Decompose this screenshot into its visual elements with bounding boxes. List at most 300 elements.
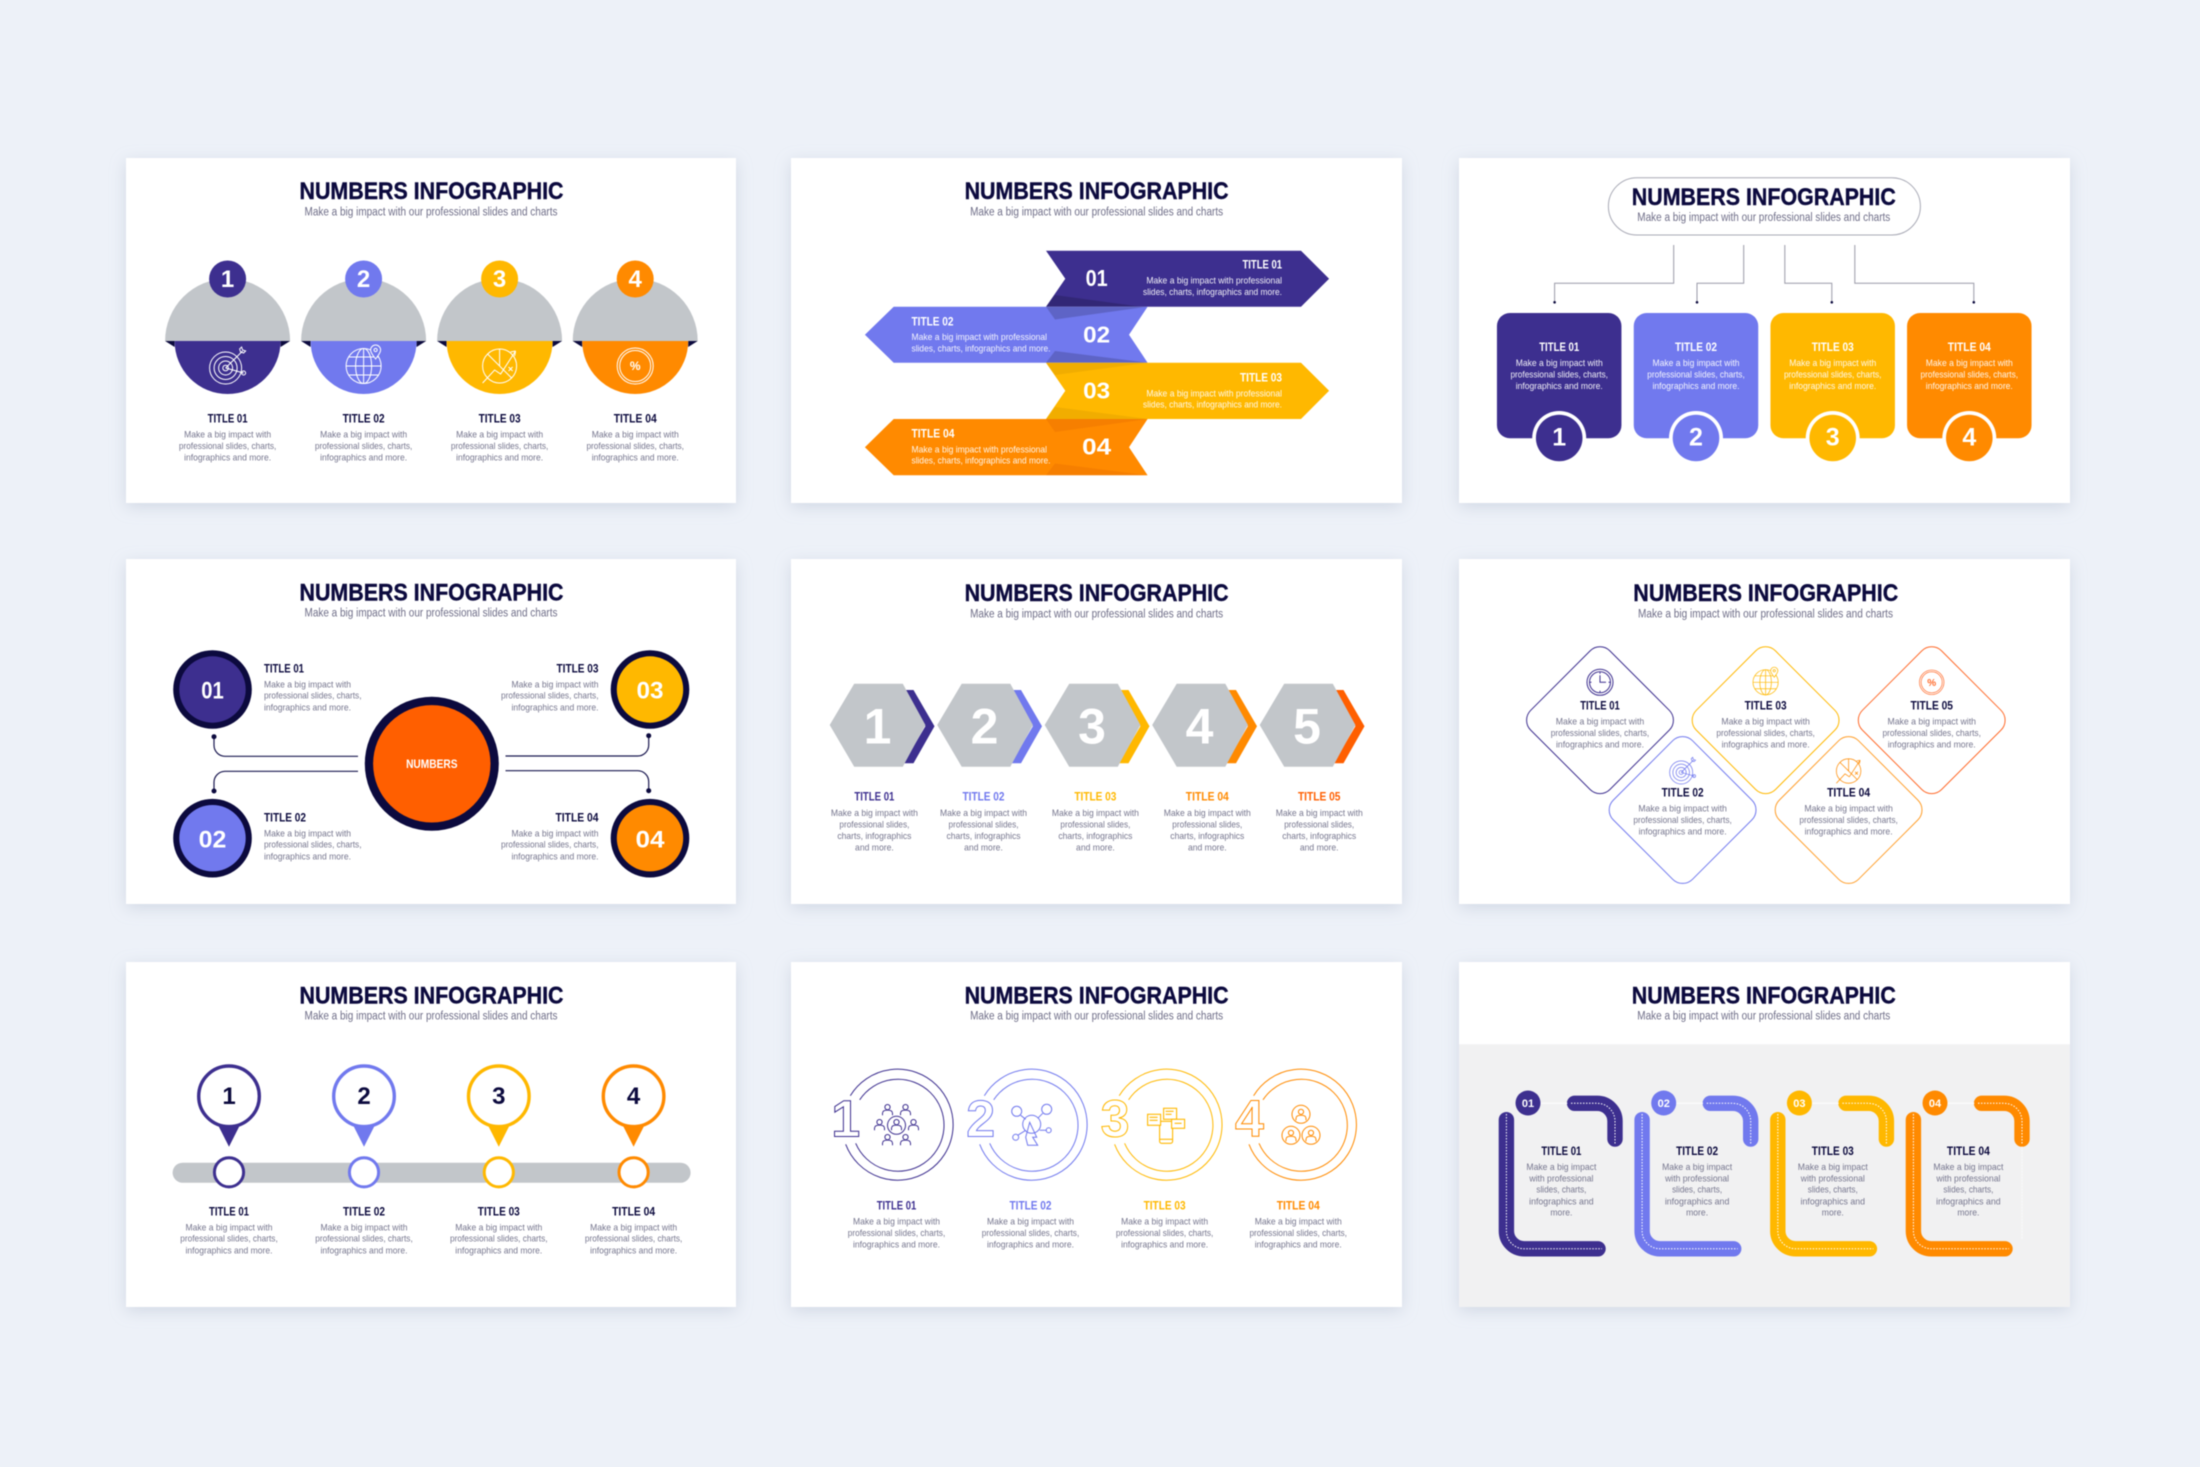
text block: professional slides, charts,	[586, 441, 684, 452]
heading: NUMBERS INFOGRAPHIC	[1633, 580, 1898, 607]
bracket 1: more.	[1550, 1208, 1572, 1219]
diamond 5: Make a big impact with	[1887, 716, 1976, 727]
text 1: professional slides,	[839, 819, 909, 830]
text 04: Make a big impact with	[512, 828, 598, 839]
hexagon 5	[1260, 684, 1364, 767]
text 4: professional slides,	[1172, 819, 1242, 830]
text 4	[1249, 1200, 1347, 1251]
heading	[965, 178, 1229, 218]
text 01: Make a big impact with	[264, 679, 351, 690]
diamond 5: infographics and more.	[1888, 739, 1976, 750]
text block: professional slides, charts,	[451, 441, 548, 452]
ring 1: 1	[831, 1091, 860, 1149]
hexagon 2	[937, 684, 1042, 767]
pin 1: Make a big impact with	[186, 1222, 272, 1233]
node 04	[611, 799, 689, 878]
ring 3	[1101, 1069, 1222, 1180]
card 2: TITLE 02	[1675, 341, 1717, 354]
text 2: charts, infographics	[946, 831, 1021, 842]
heading	[300, 983, 564, 1022]
heading: NUMBERS INFOGRAPHIC	[965, 580, 1229, 607]
diamond 1: infographics and more.	[1556, 739, 1644, 750]
diamond 4: professional slides, charts,	[1799, 815, 1898, 826]
bracket 3: with professional	[1800, 1173, 1865, 1184]
panel: slide 3 org chart cards	[1459, 158, 2070, 503]
heading: Make a big impact with our professional slides and charts	[970, 206, 1223, 218]
text 1: and more.	[855, 842, 894, 853]
card 1: professional slides, charts,	[1510, 369, 1608, 380]
bracket 2	[1642, 1090, 1751, 1249]
text 3: Make a big impact with	[1121, 1217, 1208, 1228]
diamond 3: TITLE 03	[1745, 699, 1787, 712]
bracket 1: 01	[1522, 1098, 1534, 1110]
icon: connected people	[1282, 1105, 1320, 1144]
diamond 3	[1686, 641, 1845, 799]
bracket 2: slides, charts,	[1672, 1185, 1722, 1196]
card 4: TITLE 04	[1948, 341, 1991, 354]
diamond 5: professional slides, charts,	[1882, 728, 1981, 739]
column 4	[573, 260, 698, 463]
text 3: TITLE 03	[1144, 1200, 1186, 1213]
text block: infographics and more.	[320, 452, 407, 463]
arrow 1	[1046, 251, 1329, 307]
card 2	[1634, 313, 1758, 465]
text 4: TITLE 04	[1186, 790, 1229, 803]
hexagon 4	[1152, 684, 1257, 767]
bracket 1: with professional	[1528, 1173, 1593, 1184]
column 2: 2	[357, 266, 370, 293]
heading: Make a big impact with our professional slides and charts	[304, 206, 558, 218]
text 04	[501, 812, 599, 862]
pin 3: Make a big impact with	[455, 1222, 542, 1233]
grey content band	[1459, 1044, 2070, 1307]
bracket 4: TITLE 04	[1947, 1145, 1990, 1158]
text 4: infographics and more.	[1255, 1240, 1342, 1251]
text block: Make a big impact with	[592, 429, 679, 440]
node 02	[173, 799, 252, 878]
text block: TITLE 01	[208, 412, 248, 425]
diamond 3: infographics and more.	[1722, 739, 1810, 750]
text 03: TITLE 03	[556, 663, 599, 676]
column 2	[301, 260, 426, 463]
panel: slide 9 road brackets	[1459, 962, 2070, 1307]
connector lines	[1553, 245, 1975, 304]
text 3: Make a big impact with	[1052, 808, 1139, 819]
text 02: Make a big impact with	[264, 828, 351, 839]
arrow 3: Make a big impact with professional	[1146, 388, 1282, 399]
diamond 2: professional slides, charts,	[1633, 815, 1732, 826]
diamond 4: Make a big impact with	[1804, 804, 1893, 815]
node 04: 04	[636, 826, 665, 853]
diamond 5: %	[1927, 678, 1936, 689]
pin 4: 4	[627, 1083, 641, 1110]
icon: pie chart	[483, 349, 517, 383]
bracket 3: more.	[1822, 1208, 1844, 1219]
ring 1	[831, 1069, 953, 1180]
text 4: Make a big impact with	[1164, 808, 1251, 819]
text 5: professional slides,	[1284, 819, 1354, 830]
arrow 1: TITLE 01	[1242, 259, 1282, 272]
pin 4: infographics and more.	[590, 1245, 677, 1256]
pin 1: infographics and more.	[186, 1245, 272, 1256]
text 2: TITLE 02	[1010, 1200, 1052, 1213]
panel: slide 8 outlined rings	[791, 962, 1402, 1307]
text block: Make a big impact with	[456, 429, 543, 440]
text 03	[501, 663, 599, 713]
diamond 2: TITLE 02	[1662, 786, 1704, 799]
hub circle: NUMBERS	[406, 759, 458, 771]
heading: Make a big impact with our professional slides and charts	[970, 609, 1223, 621]
text 3: and more.	[1076, 842, 1115, 853]
arrow 1: 01	[1086, 265, 1108, 291]
pin 1	[180, 1066, 278, 1256]
bracket 2: TITLE 02	[1676, 1145, 1718, 1158]
text 2	[940, 790, 1027, 853]
pin 2	[315, 1066, 413, 1256]
pin 3: 3	[492, 1083, 505, 1110]
card 2: professional slides, charts,	[1647, 369, 1745, 380]
node 01: 01	[201, 677, 224, 704]
heading: Make a big impact with our professional slides and charts	[304, 1010, 558, 1022]
arrow 2	[865, 307, 1148, 363]
column 3	[437, 260, 562, 463]
text 2	[982, 1200, 1079, 1251]
text 04: TITLE 04	[556, 812, 599, 825]
heading	[300, 178, 564, 218]
bracket 2: Make a big impact	[1662, 1162, 1732, 1173]
card 3: professional slides, charts,	[1784, 369, 1881, 380]
diamond 2	[1603, 731, 1762, 889]
heading pill: NUMBERS INFOGRAPHIC	[1632, 184, 1896, 211]
node 01	[173, 650, 252, 729]
bracket 3: TITLE 03	[1812, 1145, 1854, 1158]
arrow 4	[865, 419, 1148, 475]
diamond 1: professional slides, charts,	[1551, 728, 1649, 739]
pin 4: TITLE 04	[612, 1205, 656, 1218]
ring 2: 2	[966, 1091, 995, 1149]
icon: phone chat	[1148, 1108, 1185, 1143]
hexagon 3	[1045, 684, 1150, 767]
pin 2: professional slides, charts,	[315, 1234, 413, 1245]
diamond 4: infographics and more.	[1805, 826, 1893, 837]
bracket 3	[1778, 1090, 1886, 1249]
heading	[965, 983, 1229, 1022]
card 2: Make a big impact with	[1652, 358, 1740, 369]
pin 3: infographics and more.	[455, 1245, 542, 1256]
text block	[586, 412, 684, 463]
card 2: 2	[1689, 424, 1703, 452]
text block	[315, 412, 412, 463]
card 1: infographics and more.	[1516, 381, 1603, 392]
card 2: infographics and more.	[1652, 381, 1740, 392]
text 02: TITLE 02	[264, 812, 306, 825]
text 2: Make a big impact with	[940, 808, 1027, 819]
pin 2: TITLE 02	[343, 1205, 385, 1218]
panel: slide 6 outlined diamonds	[1459, 559, 2070, 904]
bracket 1: infographics and	[1529, 1196, 1594, 1207]
pin 2: Make a big impact with	[320, 1222, 408, 1233]
arrow 4: TITLE 04	[912, 427, 955, 440]
connectors	[212, 733, 651, 794]
bracket 2: infographics and	[1665, 1196, 1729, 1207]
bracket 3: 03	[1793, 1098, 1806, 1110]
hub circle	[365, 697, 499, 831]
text 5: TITLE 05	[1298, 790, 1341, 803]
text 5: and more.	[1300, 842, 1339, 853]
heading: NUMBERS INFOGRAPHIC	[300, 178, 564, 205]
arrow 2: Make a big impact with professional	[912, 332, 1047, 343]
diamond 1: TITLE 01	[1580, 699, 1620, 712]
bracket 1: Make a big impact	[1526, 1162, 1597, 1173]
text 4: Make a big impact with	[1255, 1217, 1342, 1228]
text 03: professional slides, charts,	[501, 691, 598, 702]
card 4: infographics and more.	[1926, 381, 2013, 392]
hexagon 3: 3	[1078, 698, 1106, 754]
card 1: Make a big impact with	[1516, 358, 1603, 369]
hexagon 2: 2	[971, 698, 998, 754]
diamond 4	[1769, 731, 1928, 889]
card 4: Make a big impact with	[1926, 358, 2013, 369]
text 4	[1164, 790, 1251, 853]
text 1	[831, 790, 918, 853]
text block: Make a big impact with	[320, 429, 407, 440]
hexagon 4: 4	[1186, 698, 1214, 754]
text 1: charts, infographics	[837, 831, 912, 842]
text 3: charts, infographics	[1058, 831, 1133, 842]
card 3	[1770, 313, 1895, 465]
diamond 3: professional slides, charts,	[1716, 728, 1815, 739]
icon: click network	[1012, 1104, 1052, 1145]
text 5	[1276, 790, 1363, 853]
pin 3: TITLE 03	[478, 1205, 520, 1218]
heading pill	[1608, 178, 1920, 235]
text 02: infographics and more.	[264, 851, 351, 862]
bracket 1: TITLE 01	[1541, 1145, 1582, 1158]
card 3: Make a big impact with	[1789, 358, 1876, 369]
text 02: professional slides, charts,	[264, 840, 362, 851]
pin 1: 1	[222, 1083, 236, 1110]
bracket 3: Make a big impact	[1798, 1162, 1868, 1173]
heading: NUMBERS INFOGRAPHIC	[965, 983, 1229, 1010]
arrow 1: Make a big impact with professional	[1146, 276, 1282, 287]
arrow 3: 03	[1083, 377, 1110, 403]
pin 4: professional slides, charts,	[585, 1234, 682, 1245]
arrow 4: Make a big impact with professional	[912, 444, 1047, 455]
hexagon 1: 1	[864, 698, 891, 754]
card 4: 4	[1962, 424, 1976, 452]
arrow 2: slides, charts, infographics and more.	[912, 343, 1050, 354]
arrow 3: TITLE 03	[1240, 371, 1282, 384]
text 2: and more.	[964, 842, 1003, 853]
diamond 3: Make a big impact with	[1721, 716, 1810, 727]
text 01: infographics and more.	[264, 702, 351, 713]
text 2: professional slides,	[948, 819, 1018, 830]
text 2: Make a big impact with	[987, 1217, 1074, 1228]
text 1: TITLE 01	[854, 790, 895, 803]
heading: NUMBERS INFOGRAPHIC	[300, 983, 564, 1010]
arrow 1: slides, charts, infographics and more.	[1143, 287, 1282, 298]
text 1: Make a big impact with	[853, 1217, 940, 1228]
heading: NUMBERS INFOGRAPHIC	[300, 579, 564, 606]
bracket 4	[1913, 1090, 2022, 1249]
arrow 4: 04	[1082, 434, 1111, 460]
ring 4	[1235, 1069, 1356, 1180]
text 01: professional slides, charts,	[264, 691, 362, 702]
text 4: professional slides, charts,	[1249, 1228, 1347, 1239]
heading	[965, 580, 1229, 621]
heading: NUMBERS INFOGRAPHIC	[1632, 983, 1896, 1010]
diamond 1	[1521, 641, 1679, 799]
text block: TITLE 03	[479, 412, 521, 425]
text 04: infographics and more.	[512, 851, 598, 862]
card 4: professional slides, charts,	[1921, 369, 2018, 380]
column 1: 1	[221, 266, 234, 293]
heading: Make a big impact with our professional slides and charts	[304, 608, 558, 620]
text 4: charts, infographics	[1170, 831, 1245, 842]
heading pill: Make a big impact with our professional slides and charts	[1637, 212, 1891, 224]
text 2: professional slides, charts,	[982, 1228, 1079, 1239]
diamond 4: TITLE 04	[1827, 786, 1871, 799]
icon: target	[210, 347, 246, 384]
text block: infographics and more.	[184, 452, 271, 463]
heading: Make a big impact with our professional slides and charts	[1638, 609, 1893, 621]
node 02: 02	[199, 826, 226, 853]
text 1: TITLE 01	[877, 1200, 917, 1213]
panel: slide 4 hub and spokes	[126, 559, 736, 904]
card 1: 1	[1552, 424, 1566, 452]
pin 4: Make a big impact with	[590, 1222, 677, 1233]
heading	[1632, 983, 1896, 1022]
card 3: infographics and more.	[1789, 381, 1876, 392]
text 2: infographics and more.	[987, 1240, 1074, 1251]
pin 4	[585, 1066, 682, 1256]
icon: percent coin: %	[630, 359, 641, 373]
text 01	[264, 663, 362, 713]
bracket 2: with professional	[1664, 1173, 1729, 1184]
hexagon 5: 5	[1293, 698, 1321, 754]
text 3: professional slides,	[1060, 819, 1130, 830]
text 3	[1116, 1200, 1213, 1251]
card 4	[1907, 313, 2032, 465]
ring 2	[966, 1069, 1087, 1180]
ring 3: 3	[1101, 1091, 1130, 1149]
diamond 2: infographics and more.	[1639, 826, 1727, 837]
card 1: TITLE 01	[1539, 341, 1580, 354]
panel: slide 5 hexagon steps	[791, 559, 1402, 904]
pin 2: infographics and more.	[320, 1245, 408, 1256]
pin 1: TITLE 01	[209, 1205, 249, 1218]
card 3: 3	[1826, 424, 1840, 452]
bracket 4: more.	[1957, 1208, 1979, 1219]
text 1: Make a big impact with	[831, 808, 918, 819]
ring 4: 4	[1235, 1091, 1264, 1149]
arrow 2: TITLE 02	[912, 315, 954, 328]
text 3: professional slides, charts,	[1116, 1228, 1213, 1239]
bracket 1	[1506, 1090, 1615, 1249]
card 3: TITLE 03	[1812, 341, 1854, 354]
bracket 4: slides, charts,	[1943, 1185, 1993, 1196]
text block	[179, 412, 276, 463]
diamond 1: Make a big impact with	[1556, 716, 1644, 727]
text block: professional slides, charts,	[315, 441, 412, 452]
text block: infographics and more.	[592, 452, 679, 463]
bracket 3: slides, charts,	[1808, 1185, 1858, 1196]
heading: Make a big impact with our professional slides and charts	[1637, 1010, 1891, 1022]
bracket 4: with professional	[1935, 1173, 2000, 1184]
text 5: Make a big impact with	[1276, 808, 1363, 819]
text 3	[1052, 790, 1139, 853]
bracket 4: 04	[1929, 1098, 1942, 1110]
node 03: 03	[636, 677, 664, 704]
text 1	[848, 1200, 945, 1251]
bracket 2: more.	[1686, 1208, 1708, 1219]
text 03: Make a big impact with	[512, 679, 598, 690]
heading: Make a big impact with our professional slides and charts	[970, 1010, 1223, 1022]
arrow 4: slides, charts, infographics and more.	[912, 456, 1050, 467]
heading: NUMBERS INFOGRAPHIC	[965, 178, 1229, 205]
pin 1: professional slides, charts,	[180, 1234, 278, 1245]
text 5: charts, infographics	[1282, 831, 1356, 842]
arrow 2: 02	[1083, 321, 1110, 347]
icon: globe	[346, 345, 381, 384]
text 1: infographics and more.	[853, 1240, 940, 1251]
text 01: TITLE 01	[264, 663, 304, 676]
bracket 4: infographics and	[1936, 1196, 2001, 1207]
column 4: 4	[629, 266, 643, 293]
bracket 2: 02	[1658, 1098, 1670, 1110]
text 3: TITLE 03	[1074, 790, 1117, 803]
panel: slide 7 pin timeline	[126, 962, 736, 1307]
text block	[451, 412, 548, 463]
timeline bar	[173, 1163, 691, 1183]
icon: team target	[874, 1104, 918, 1145]
text 4: and more.	[1188, 842, 1227, 853]
text block: infographics and more.	[456, 452, 543, 463]
bracket 4: Make a big impact	[1933, 1162, 2004, 1173]
text 3: infographics and more.	[1121, 1240, 1208, 1251]
pin 2: 2	[357, 1083, 371, 1110]
text 03: infographics and more.	[512, 702, 598, 713]
text 4: TITLE 04	[1277, 1200, 1320, 1213]
diamond 5	[1853, 641, 2011, 799]
text 04: professional slides, charts,	[501, 840, 598, 851]
panel: slide 2 stacked arrows	[791, 158, 1402, 503]
card 1	[1497, 313, 1621, 465]
text 1: professional slides, charts,	[848, 1228, 945, 1239]
text block: Make a big impact with	[184, 429, 271, 440]
text block: TITLE 04	[614, 412, 657, 425]
diamond 2: Make a big impact with	[1638, 804, 1727, 815]
heading	[300, 579, 564, 620]
bracket 1: slides, charts,	[1536, 1185, 1586, 1196]
column 3: 3	[493, 266, 506, 293]
bracket 3: infographics and	[1801, 1196, 1865, 1207]
panel: slide 1 half-dome numbers	[126, 158, 736, 503]
icon: percent coin	[617, 348, 653, 384]
arrow 3: slides, charts, infographics and more.	[1143, 400, 1282, 411]
column 1	[165, 260, 290, 463]
text 2: TITLE 02	[962, 790, 1004, 803]
text block: TITLE 02	[343, 412, 385, 425]
hexagon 1	[830, 684, 934, 767]
node 03	[611, 650, 689, 729]
text block: professional slides, charts,	[179, 441, 276, 452]
diamond 5: TITLE 05	[1910, 699, 1953, 712]
pin 3	[450, 1066, 548, 1256]
text 02	[264, 812, 362, 862]
heading	[1633, 580, 1898, 621]
pin 3: professional slides, charts,	[450, 1234, 548, 1245]
